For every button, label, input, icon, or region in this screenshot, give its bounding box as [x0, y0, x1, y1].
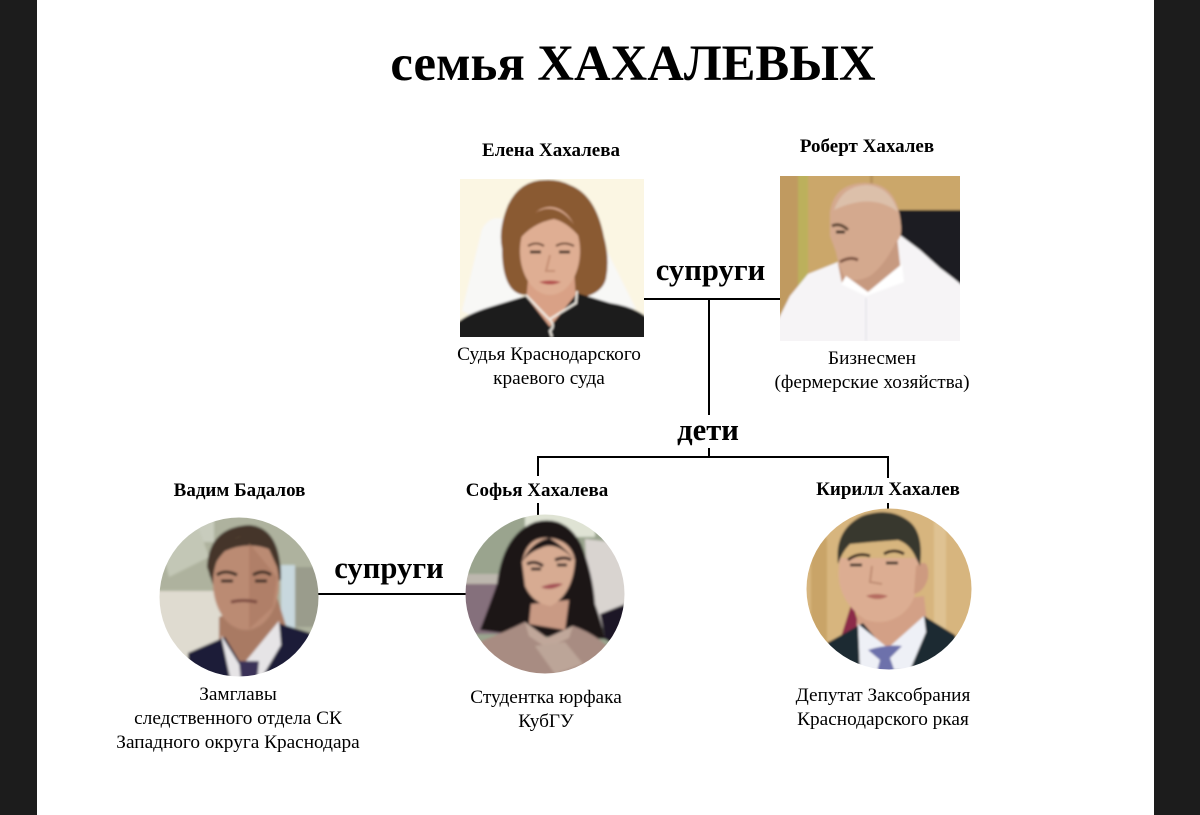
- description: Елена: Судья Краснодарского: [457, 344, 641, 365]
- description: Софья: КубГУ: [518, 711, 574, 732]
- description: Вадим: следственного отдела СК: [134, 708, 342, 729]
- description: Софья: Студентка юрфака: [470, 687, 622, 708]
- relation: супруги (parents): супруги: [656, 253, 765, 287]
- description: Роберт: [774, 348, 970, 393]
- photo: Софья Хахалева: [466, 514, 624, 674]
- description: Вадим: [116, 684, 360, 753]
- description: Елена: [457, 344, 641, 389]
- description: Кирилл: [796, 685, 970, 730]
- description: Роберт: Бизнесмен: [828, 348, 916, 369]
- relation: супруги (children): супруги: [334, 551, 444, 585]
- description: Роберт: (фермерские хозяйства): [774, 372, 970, 393]
- description: Вадим: Замглавы: [199, 684, 277, 705]
- relation: дети: дети: [677, 413, 739, 447]
- name: Кирилл Хахалев: Кирилл Хахалев: [816, 479, 960, 500]
- photo: Елена Хахалева: [460, 179, 644, 337]
- name: Роберт Хахалев: Роберт Хахалев: [800, 136, 934, 157]
- photo: Кирилл Хахалев: [806, 508, 972, 670]
- description: Елена: краевого суда: [493, 368, 605, 389]
- name: Елена Хахалева: Елена Хахалева: [482, 140, 620, 161]
- photo: Вадим Бадалов: [160, 518, 318, 676]
- description: Кирилл: Краснодарского ркая: [797, 709, 969, 730]
- description: Софья: [470, 687, 622, 732]
- name: Софья Хахалева: Софья Хахалева: [466, 480, 608, 501]
- description: Кирилл: Депутат Заксобрания: [796, 685, 970, 706]
- name: Вадим Бадалов: Вадим Бадалов: [174, 480, 305, 501]
- photo: Роберт Хахалев: [780, 176, 960, 341]
- title: семья ХАХАЛЕВЫХ: [390, 35, 876, 91]
- description: Вадим: Западного округа Краснодара: [116, 732, 360, 753]
